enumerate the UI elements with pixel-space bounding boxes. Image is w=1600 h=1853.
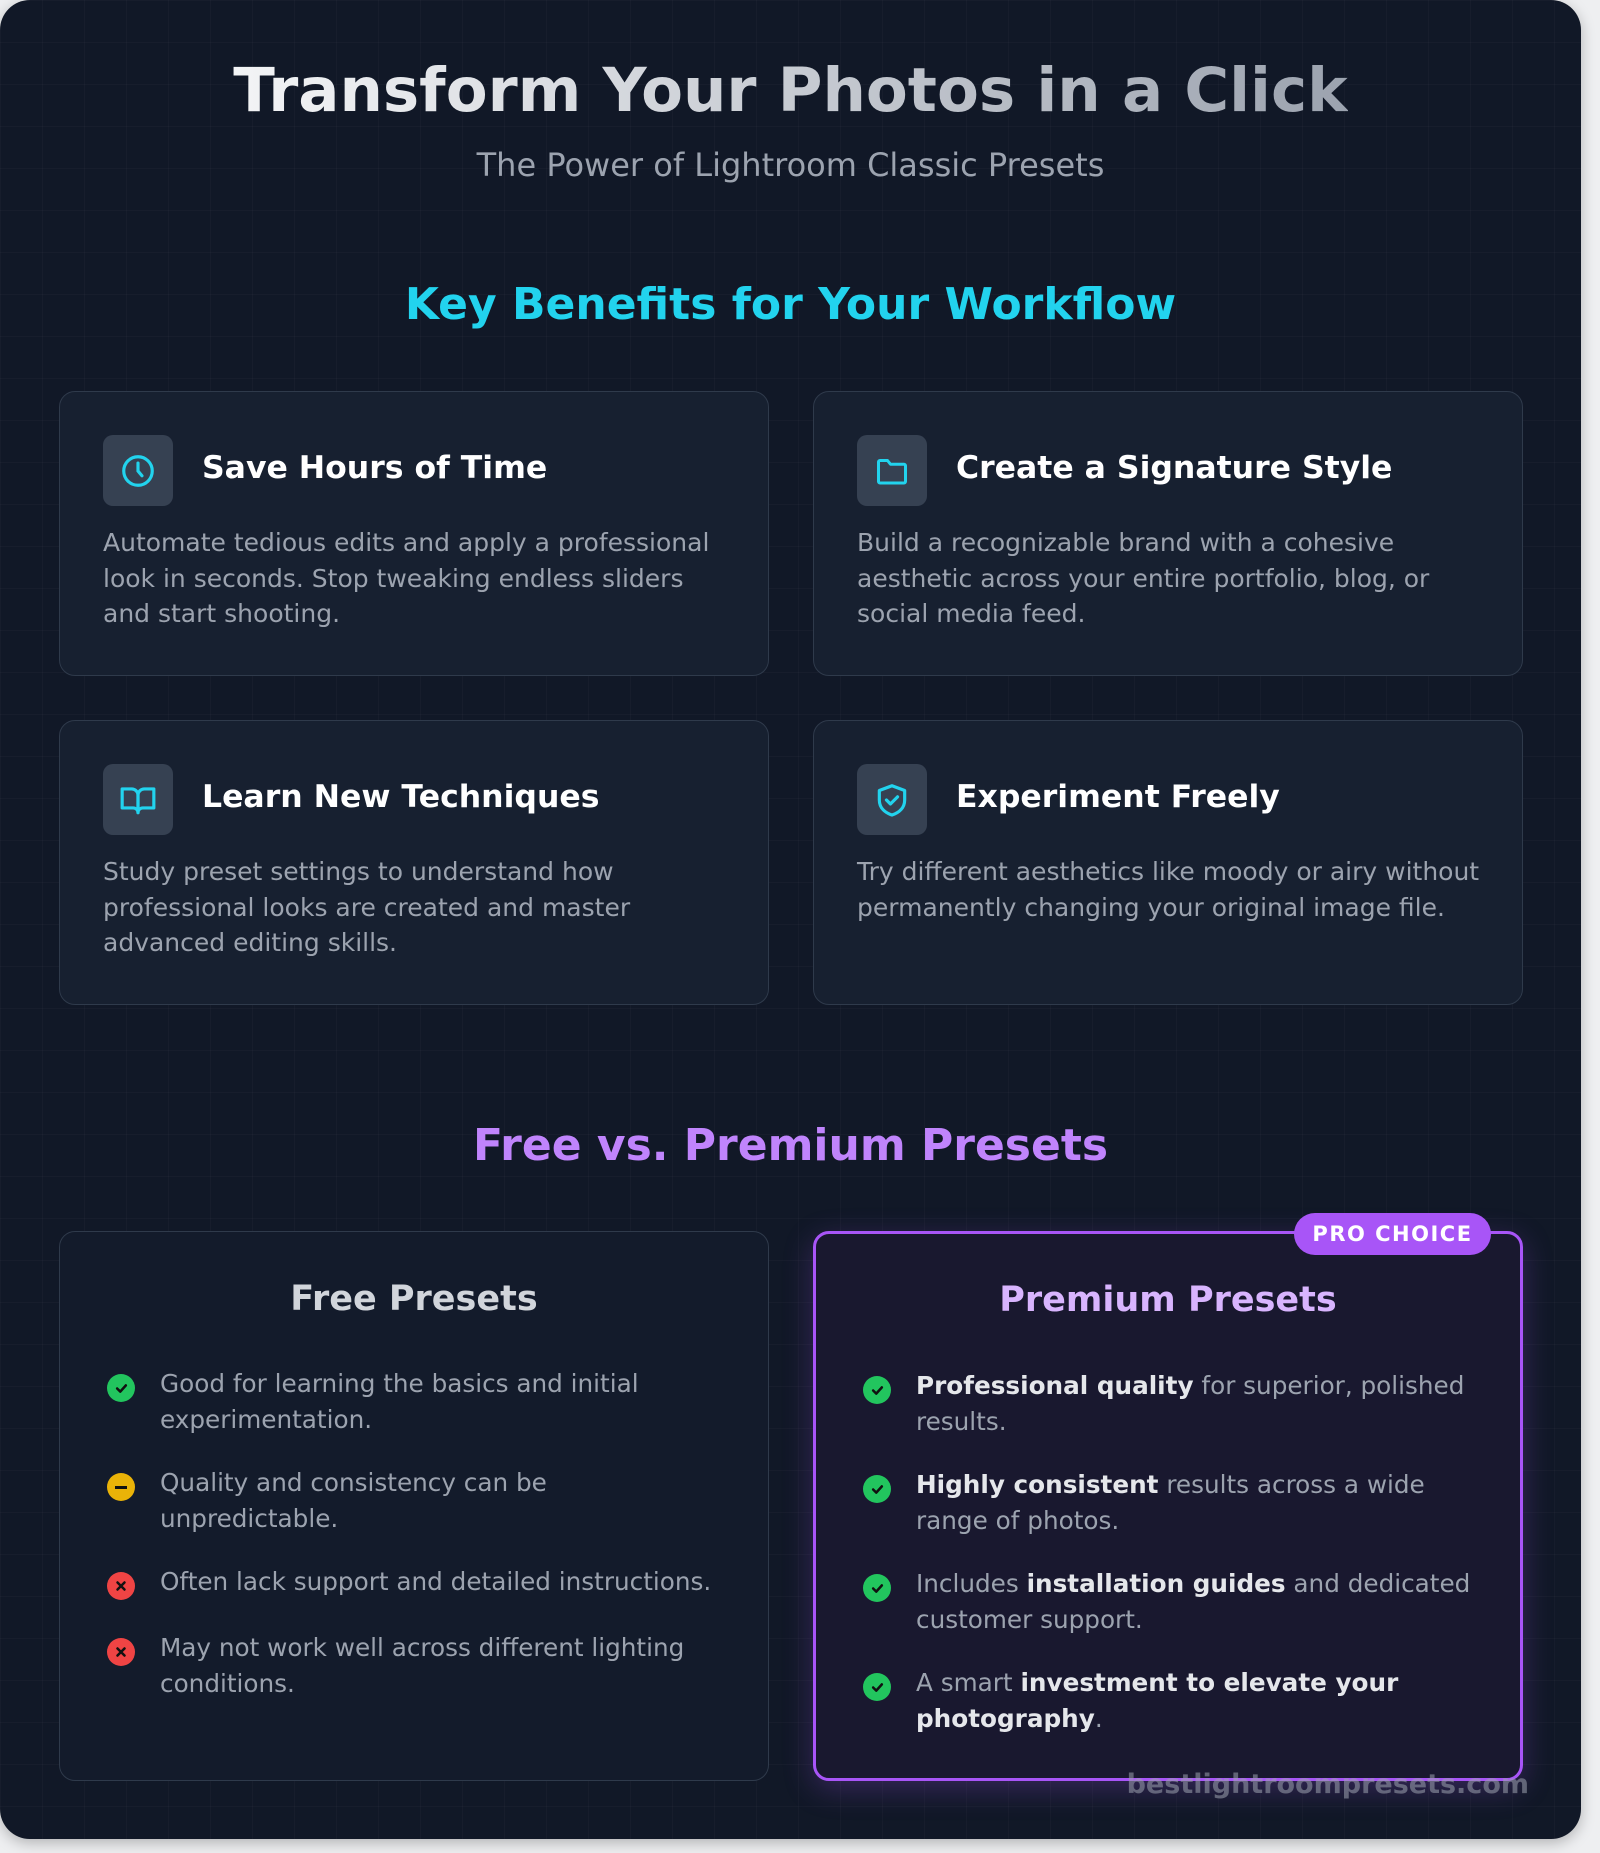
panel: free presets [59,1231,769,1781]
panel: signature style [813,391,1523,676]
icon: clock [103,435,173,506]
text: Study preset settings to understand how professional looks are created and master advanced editing skills. [103,857,630,957]
panel: premium presets [813,1231,1523,1781]
item 2: Quality and consistency can be [160,1468,547,1497]
heading: Learn New Techniques [202,779,600,815]
text: Try different aesthetics like moody or airy without permanently changing your original image file. [857,857,1479,922]
heading: key benefits: Key Benefits for Your Workflow [405,279,1176,330]
badge: pro choice [1294,1213,1491,1255]
badge: pro choice: PRO CHOICE [1312,1222,1473,1246]
item 2 [863,1470,1425,1534]
card title: Premium Presets [999,1280,1337,1320]
icon: folder [857,435,927,506]
panel: experiment [813,720,1523,1005]
text: Automate tedious edits and apply a professional look in seconds. Stop tweaking endless sliders and start shooting. [103,528,709,628]
heading: Save Hours of Time [202,450,547,486]
item 2: Highly consistent results across a wide [916,1470,1425,1499]
heading: Create a Signature Style [956,450,1392,486]
card title: Free Presets [290,1279,538,1319]
heading: free vs premium: Free vs. Premium Presets [473,1120,1108,1171]
watermark: bestlightroompresets.com [1127,1769,1529,1800]
item 3: Includes installation guides and dedicated customer support. [916,1569,1470,1634]
item 1: Good for learning the basics and initial experimentation. [160,1369,639,1434]
heading: Experiment Freely [956,779,1280,815]
title: Transform Your Photos in a Click [233,55,1348,126]
item 2: range of photos. [916,1506,1119,1534]
subtitle: The Power of Lightroom Classic Presets [477,146,1104,184]
text: Build a recognizable brand with a cohesive aesthetic across your entire portfolio, blog, or social media feed. [857,528,1429,628]
item 4: A smart investment to elevate your photography. [916,1668,1398,1732]
item 3: Often lack support and detailed instructions. [160,1567,711,1596]
item 2 [107,1468,547,1532]
item 1: Professional quality for superior, polished results. [916,1371,1464,1436]
icon: book [103,764,173,835]
item 4: May not work well across different lighting conditions. [160,1633,684,1698]
icon: shield [857,764,927,835]
panel: learn techniques [59,720,769,1005]
item 2: unpredictable. [160,1504,338,1532]
panel: save hours [59,391,769,676]
